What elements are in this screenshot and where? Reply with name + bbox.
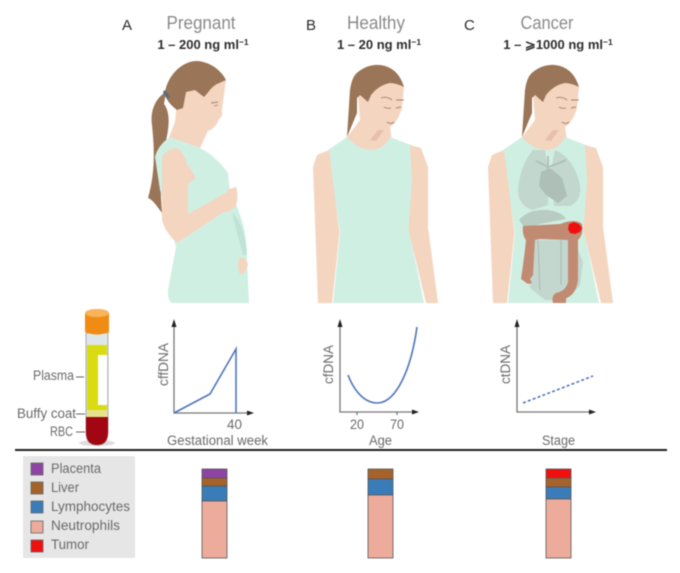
organs: lungs and heart [518, 150, 580, 210]
concentration range: pregnant: −1 [239, 37, 249, 47]
legend [23, 456, 135, 558]
heading: Pregnant: Pregnant [166, 13, 236, 33]
chart: age [321, 319, 419, 448]
tube glass [86, 333, 108, 445]
legend: tumor: Tumor [51, 537, 89, 552]
legend: lymphocytes: Lymphocytes [51, 499, 130, 514]
data curve [348, 327, 417, 403]
panel label B: B [306, 17, 316, 34]
tumor [568, 222, 582, 234]
divider line [15, 449, 667, 451]
stacked bar: healthy [368, 469, 393, 558]
tube highlight [98, 355, 107, 405]
heading: Cancer: Cancer [520, 13, 574, 33]
data dotted line [523, 376, 593, 403]
plasma [87, 345, 107, 410]
blood tube [17, 309, 115, 446]
label: RBC: RBC [50, 424, 73, 439]
chart: gestational week [156, 319, 268, 448]
x label: Gestational week [167, 433, 268, 448]
tick label: 40 [227, 417, 242, 432]
concentration range: cancer: 1 – ⩾1000 ng ml [503, 37, 603, 52]
organ: colon [521, 221, 582, 303]
legend: liver: Liver [51, 480, 79, 495]
concentration range: healthy: 1 – 20 ng ml [337, 37, 411, 52]
concentration range: healthy: −1 [411, 37, 421, 47]
organs: liver and intestines [519, 210, 583, 300]
y label: ctDNA [498, 345, 513, 384]
panel label C: C [464, 17, 475, 34]
panel label A: A [122, 17, 132, 34]
figure: pregnant woman [148, 61, 249, 303]
panel: cancer [464, 13, 613, 303]
panel: pregnant [122, 13, 249, 303]
tube shadow [79, 440, 115, 446]
heading: Healthy: Healthy [347, 13, 405, 33]
label: buffy coat: Buffy coat [17, 406, 76, 421]
stacked bar: cancer [546, 469, 571, 558]
label: plasma: Plasma [33, 368, 74, 383]
y label: cfDNA [321, 345, 336, 384]
figure: healthy woman [313, 65, 438, 303]
tube cap [85, 309, 109, 334]
buffy coat [87, 410, 107, 417]
y label: cffDNA [156, 343, 171, 386]
tick labels: 20 [350, 417, 364, 432]
stacked bar: pregnant [202, 469, 227, 558]
red blood cells [86, 417, 108, 445]
chart: stage [498, 319, 596, 448]
concentration range: pregnant: 1 – 200 ng ml [157, 37, 239, 52]
data line [174, 349, 236, 413]
legend: neutrophils: Neutrophils [51, 518, 120, 533]
figure: woman with organs [488, 65, 613, 303]
x label: Stage [542, 433, 575, 448]
chart: age: 70 [390, 417, 404, 432]
concentration range: cancer: −1 [603, 37, 613, 47]
x label: Age [369, 433, 392, 448]
panel: healthy [306, 13, 438, 303]
legend: placenta: Placenta [51, 461, 101, 476]
